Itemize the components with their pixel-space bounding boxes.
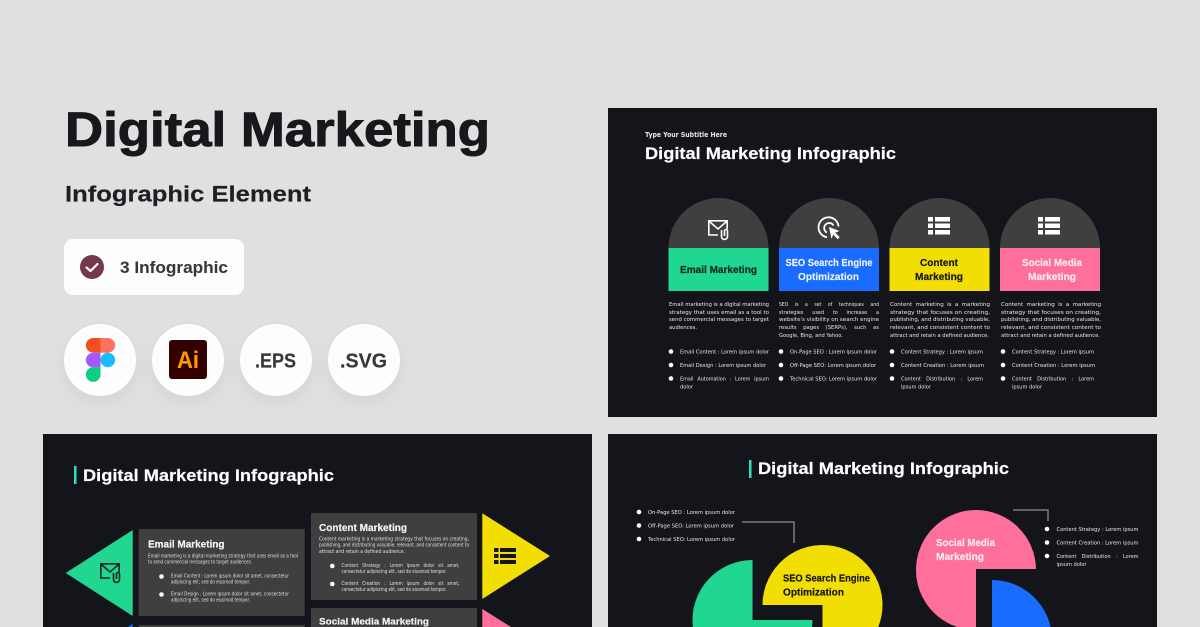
yellow segment: SEO: SEO Search Engine [783, 574, 870, 584]
bullet list: Content Distribution : Lorem [901, 376, 983, 382]
column: SEO: Optimization [798, 272, 859, 283]
column: social media marketing [1000, 198, 1101, 390]
yellow segment: SEO: Optimization [783, 588, 844, 598]
icon: Adobe Illustrator: Ai [177, 347, 199, 374]
card: content marketing: consectetur adipiscing elit, sed do eiusmod tempor. [342, 587, 446, 593]
card: content marketing: Content marketing is a marketing strategy that focuses on creating, [319, 536, 469, 542]
description: attract and retain a defined audience. [890, 333, 989, 339]
panel title: Digital Marketing Infographic [645, 144, 896, 163]
pink triangle, cropped [482, 609, 511, 627]
blue segment [992, 580, 1051, 627]
card: content marketing: Content Strategy : Lorem ipsum dolor sit amet, [342, 563, 460, 569]
icon: target cursor [819, 217, 840, 239]
connector: social list to pink segment [1013, 510, 1048, 521]
column: email marketing [668, 198, 770, 390]
card: content marketing: Content Creation : Lorem ipsum dolor sit amet, [342, 581, 460, 587]
panel: arches infographic [608, 108, 1157, 417]
description [779, 302, 880, 339]
bullet list: ipsum dolor [1012, 384, 1043, 390]
bullet list [669, 349, 770, 390]
panel title: Digital Marketing Infographic [83, 466, 334, 485]
subtitle: Infographic Element [65, 182, 312, 206]
panel: triangles infographic [43, 434, 592, 627]
description: attract and retain a defined audience. [1001, 333, 1100, 339]
description: publishing, and distributing valuable, [1001, 317, 1101, 323]
bullet list: Email Content : Lorem ipsum dolor [680, 350, 770, 356]
bullet list: Content Distribution : Lorem [1012, 376, 1094, 382]
card: content marketing: attract and retain a defined audience. [319, 549, 405, 555]
description: send commercial messages to target [669, 317, 769, 323]
card: content marketing: Content Marketing [319, 523, 407, 534]
description [669, 302, 769, 331]
column: content marketing: Content [920, 258, 959, 269]
bullet list: Email Design : Lorem ipsum dolor [680, 363, 767, 369]
card: email marketing: Email Design : Lorem ipsum dolor sit amet, consectetur [171, 591, 289, 597]
yellow triangle with list icon [482, 513, 550, 599]
bullet list: Email Automation : Lorem ipsum [680, 376, 769, 382]
icon: EPS format: .EPS [255, 350, 296, 372]
card: email marketing: adipiscing elit, sed do eiusmod tempor. [171, 597, 250, 603]
card: email marketing: Email Marketing [148, 540, 224, 550]
icon: email [709, 221, 728, 240]
panel title: Digital Marketing Infographic [758, 459, 1009, 478]
icon: list [494, 548, 516, 564]
panel: pie segments infographic [608, 434, 1157, 627]
social bullet list: Content Distribution : Lorem [1056, 554, 1138, 560]
bullet list: Content Strategy : Lorem ipsum [901, 350, 983, 356]
icon: list [928, 217, 950, 234]
SEO bullet list: On-Page SEO : Lorem ipsum dolor [648, 510, 736, 516]
bullet list [890, 349, 984, 390]
description: Content marketing is a marketing [1001, 302, 1101, 308]
card: social media marketing, cropped [311, 608, 477, 627]
column: SEO [779, 198, 880, 382]
bullet list: Content Strategy : Lorem ipsum [1012, 350, 1094, 356]
column: content marketing: Marketing [915, 272, 963, 283]
main title: Digital Marketing [65, 103, 490, 157]
pink segment: social media: Marketing [936, 552, 984, 563]
green segment [693, 560, 812, 627]
bullet list: Content Creation : Lorem ipsum [901, 363, 984, 369]
column: email marketing: Email Marketing [680, 265, 757, 276]
card: email marketing: to send commercial messages to target audiences. [148, 560, 252, 566]
icon: SVG format [328, 324, 400, 396]
SEO bullet list [637, 510, 736, 543]
description: audiences. [669, 325, 697, 331]
description: strategies used to increase a [779, 310, 879, 316]
bullet list: dolor [680, 384, 694, 390]
bullet list: Content Creation : Lorem ipsum [1012, 363, 1095, 369]
card: email marketing [139, 529, 305, 616]
accent bar [74, 466, 76, 484]
description [1001, 302, 1101, 339]
SEO bullet list: Technical SEO: Lorem ipsum dolor [647, 537, 736, 543]
bullet list [1001, 349, 1095, 390]
pink segment: social media: Social Media [936, 538, 995, 549]
description: results pages (SERPs), such as [779, 325, 879, 331]
description: strategy that focuses on creating, [1001, 310, 1101, 316]
bullet list: Technical SEO: Lorem ipsum dolor [789, 376, 878, 382]
pink segment: social media [916, 510, 1036, 627]
description [890, 302, 990, 339]
icon: Figma [64, 324, 136, 396]
badge: 3 infographic [64, 239, 244, 295]
icon: SVG format: .SVG [340, 350, 387, 372]
card: cropped lower left [139, 625, 305, 627]
social bullet list: Content Creation : Lorem ipsum [1056, 540, 1138, 546]
card: email marketing: Email Content : Lorem ipsum dolor sit amet, consectetur [171, 573, 289, 579]
accent bar [749, 460, 752, 478]
description: SEO is a set of techniques and [779, 302, 879, 308]
card: email marketing: Email marketing is a digital marketing strategy that uses email as a tool [148, 554, 298, 560]
icon: EPS format [240, 324, 312, 396]
column: content marketing [890, 198, 990, 390]
icon: check mark [80, 255, 104, 279]
blue triangle, cropped [128, 624, 133, 627]
card: content marketing: publishing, and distributing valuable, relevant, and consistent content to [319, 543, 469, 549]
description: Email marketing is a digital marketing [669, 302, 769, 308]
column: SEO: SEO Search Engine [786, 258, 873, 269]
icon: list [1038, 217, 1060, 234]
green triangle with email icon [66, 530, 133, 616]
badge label: 3 Infographic [120, 259, 228, 277]
bullet list: On-Page SEO : Lorem ipsum dolor [790, 350, 878, 356]
description: Google, Bing, and Yahoo. [779, 333, 843, 339]
column: social media marketing: Marketing [1028, 272, 1076, 283]
description: Content marketing is a marketing [890, 302, 990, 308]
card: content marketing: consectetur adipiscing elit, sed do eiusmod tempor. [342, 569, 446, 575]
description: relevant, and consistent content to [1001, 325, 1101, 331]
social bullet list: Content Strategy : Lorem ipsum [1056, 527, 1138, 533]
card: content marketing [311, 513, 477, 600]
card: email marketing: adipiscing elit, sed do eiusmod tempor. [171, 579, 250, 585]
bullet list [779, 349, 878, 382]
description: publishing, and distributing valuable, [890, 317, 990, 323]
description: website's visibility on search engine [779, 317, 880, 323]
column: social media marketing: Social Media [1022, 258, 1082, 269]
SEO bullet list: Off-Page SEO: Lorem ipsum dolor [648, 524, 735, 530]
description: strategy that uses email as a tool to [669, 310, 769, 316]
icon: email [101, 564, 120, 582]
social bullet list: ipsum dolor [1056, 562, 1087, 568]
icon: Adobe Illustrator [152, 324, 224, 396]
social bullet list [1045, 527, 1138, 568]
description: relevant, and consistent content to [890, 325, 990, 331]
panel subtitle: Type Your Subtitle Here [645, 131, 727, 139]
description: strategy that focuses on creating, [890, 310, 990, 316]
connector: SEO list to yellow segment [742, 522, 794, 543]
bullet list: ipsum dolor [901, 384, 932, 390]
bullet list: Off-Page SEO: Lorem ipsum dolor [790, 363, 877, 369]
yellow segment: SEO [762, 545, 882, 627]
